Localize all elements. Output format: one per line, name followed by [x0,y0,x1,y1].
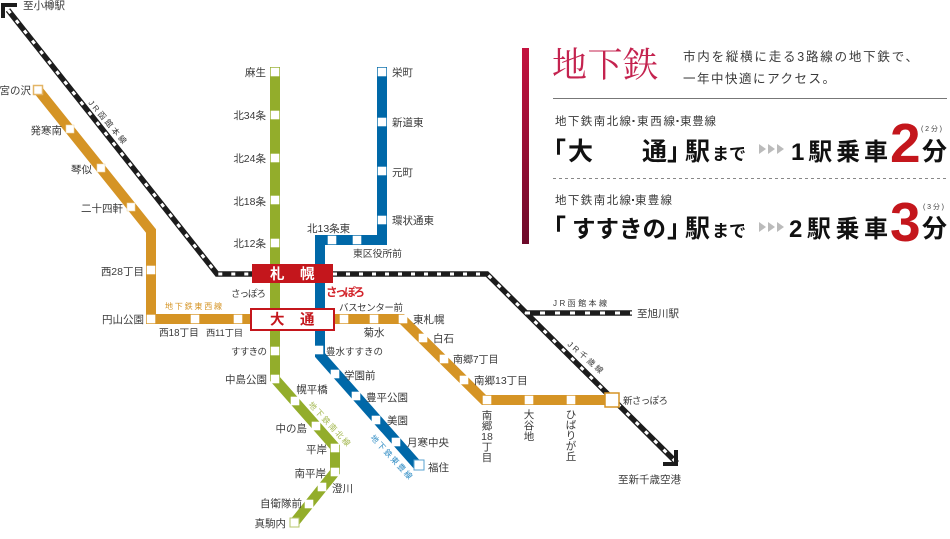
JR Hakodate branch track [525,310,632,316]
blue track [320,67,419,467]
route to Susukino: まで [712,222,746,241]
station: Odori: 大 [270,312,285,328]
station labels: Namboku line: 中の島 [276,422,307,435]
label: to Asahikawa: 至旭川駅 [637,308,679,320]
station labels: Toho line: 美園 [387,414,408,427]
Tozai line (orange) [34,86,619,407]
route to Odori: 分 [922,138,947,166]
station labels: Tozai line: 地 [524,430,535,443]
station labels: Tozai line: ひ [566,409,576,421]
station labels: Namboku line: 平岸 [306,444,327,456]
station labels: Namboku line: 自衛隊前 [260,497,302,510]
line names [555,193,672,207]
line names: 東西線 [637,115,676,128]
line names: 地下鉄南北線 [555,193,632,207]
station: Odori [251,309,334,330]
intro text: 市内を縦横に走る3路線の地下鉄で、 [683,49,918,64]
station labels: Toho line: 元町 [392,167,413,179]
label: Tozai line: 地下鉄東西線 [165,301,222,311]
station labels: Namboku line: 北12条 [233,237,266,250]
station labels: Tozai line: 発寒南 [30,124,62,137]
route to Susukino: 2駅乗車 [789,216,888,243]
orange track [38,90,252,319]
route to Susukino: すすきの [572,216,666,242]
route to Odori: 2 [890,112,921,174]
station labels: Tozai line [0,84,668,464]
label: to New Chitose Airport: 至新千歳空港 [618,474,681,486]
station labels: Tozai line: 南 [482,409,492,422]
route to Susukino: (3分) [923,202,944,211]
station labels: Tozai line: り [566,430,576,442]
orange stations [34,86,619,407]
JR railway lines [3,5,677,464]
label: JR Hakodate main line: JR函館本線 [86,98,129,146]
route to Susukino [541,191,947,253]
route to Odori: 大 [568,138,593,166]
route to Odori: 」 [667,138,692,166]
arrow: to New Chitose Airport [663,450,676,464]
panel: subway access info [522,46,947,253]
station labels: Tozai line: 南郷7丁目 [453,353,499,366]
station labels: Tozai line: 白石 [433,332,454,345]
route to Odori: 駅 [685,138,710,166]
station labels: Toho line: 学園前 [344,369,376,382]
intro text [683,49,918,86]
station: Sapporo: 札 [270,266,285,283]
station labels: Namboku line: 麻生 [245,66,266,79]
station labels: Namboku line: 幌平橋 [296,383,328,396]
station labels: Toho line: 栄町 [392,66,413,79]
station labels: Tozai line: 菊水 [364,327,385,339]
heading: 地下鉄 [552,46,658,85]
station labels: Tozai line: 西28丁目 [101,266,144,278]
station labels: Tozai line: ば [566,420,577,432]
line names [555,114,716,128]
label: JR Chitose line: JR千歳線 [566,339,605,375]
route to Susukino: 「 [541,215,566,243]
line name labels [165,301,415,481]
station labels: Tozai line: 18 [481,431,493,443]
orange track east [333,319,612,400]
line names: 地下鉄南北線 [555,114,632,128]
line names: 東豊線 [680,115,716,128]
station labels: Toho line: 新道東 [392,116,424,129]
station labels: Namboku line: 南平岸 [294,467,326,480]
station labels: Tozai line: が [566,440,577,452]
station: Sapporo: 幌 [300,266,315,283]
station labels: Tozai line: 丘 [566,451,576,463]
Toho line (blue) [315,67,424,470]
station labels: Tozai line: 新さっぽろ [623,396,668,407]
station labels: Tozai line: 西18丁目 [159,328,199,339]
station labels: Tozai line: 東札幌 [413,313,445,326]
station labels: Tozai line: 大 [524,408,535,421]
station labels: Namboku line: 澄川 [332,482,353,495]
station labels: Tozai line: 谷 [524,420,535,432]
station labels: Toho line: 福住 [428,461,449,474]
station labels: Tozai line: 宮の沢 [0,84,31,97]
route to Odori: まで [712,145,746,164]
station labels: Namboku line: さっぽろ [231,289,266,300]
JR labels [23,0,681,486]
label: subway Sapporo: さっぽろ [326,286,365,299]
green stations [271,68,339,527]
station labels: Namboku line: 北18条 [233,195,266,208]
JR main line track [8,10,677,463]
station labels: Tozai line: 南郷13丁目 [474,374,528,387]
label: Toho line: 地下鉄東豊線 [369,433,415,481]
accent bar [522,48,529,244]
station labels: Tozai line: 円山公園 [102,314,144,326]
station labels: Tozai line: 二十四軒 [81,202,123,215]
blue stations [315,68,424,470]
label: JR Hakodate main line east: JR函館本線 [553,298,607,308]
station labels: Namboku line: 北24条 [233,152,266,165]
station labels: Tozai line: 西11丁目 [206,328,243,338]
station labels: Namboku line [225,66,353,530]
line names: 東豊線 [635,194,672,207]
label: Namboku line: 地下鉄南北線 [307,400,353,448]
station: Odori: 通 [300,312,315,328]
route to Susukino: 分 [922,215,947,243]
route to Odori [541,112,947,174]
route to Odori: 1駅乗車 [791,139,888,166]
station labels: Toho line: 豊平公園 [366,391,408,404]
station: Sapporo [252,264,333,283]
route to Susukino: 」 [667,215,692,243]
station labels: Namboku line: 北34条 [233,109,266,122]
arrow: to Otaru [3,5,17,18]
station labels: Tozai line: 郷 [482,420,493,432]
intro text: 一年中快適にアクセス。 [683,71,835,86]
route to Susukino: 3 [890,191,921,253]
label: to Otaru: 至小樽駅 [23,0,65,12]
green track [275,67,335,523]
station labels: Namboku line: 中島公園 [225,373,267,386]
station labels: Tozai line: 丁 [482,442,492,454]
route to Odori: 「 [541,138,566,166]
station labels: Toho line: 豊水すすきの [326,346,383,358]
station labels: Namboku line: 真駒内 [254,517,286,530]
station labels: Tozai line: バスセンター前 [339,302,403,314]
route to Odori: 通 [642,138,667,166]
station labels: Toho line [307,66,449,474]
Namboku line (green) [271,67,339,527]
station labels: Toho line: 環状通東 [392,214,434,227]
station labels: Toho line: 東区役所前 [353,247,402,260]
station labels: Toho line: 月寒中央 [407,436,449,449]
station labels: Namboku line: すすきの [231,347,267,358]
station labels: Toho line: 北13条東 [307,222,351,235]
station labels: Tozai line: 琴似 [71,164,92,176]
route to Odori: (2分) [921,124,942,133]
route to Susukino: 駅 [685,215,710,243]
station labels: Tozai line: 目 [482,452,492,464]
